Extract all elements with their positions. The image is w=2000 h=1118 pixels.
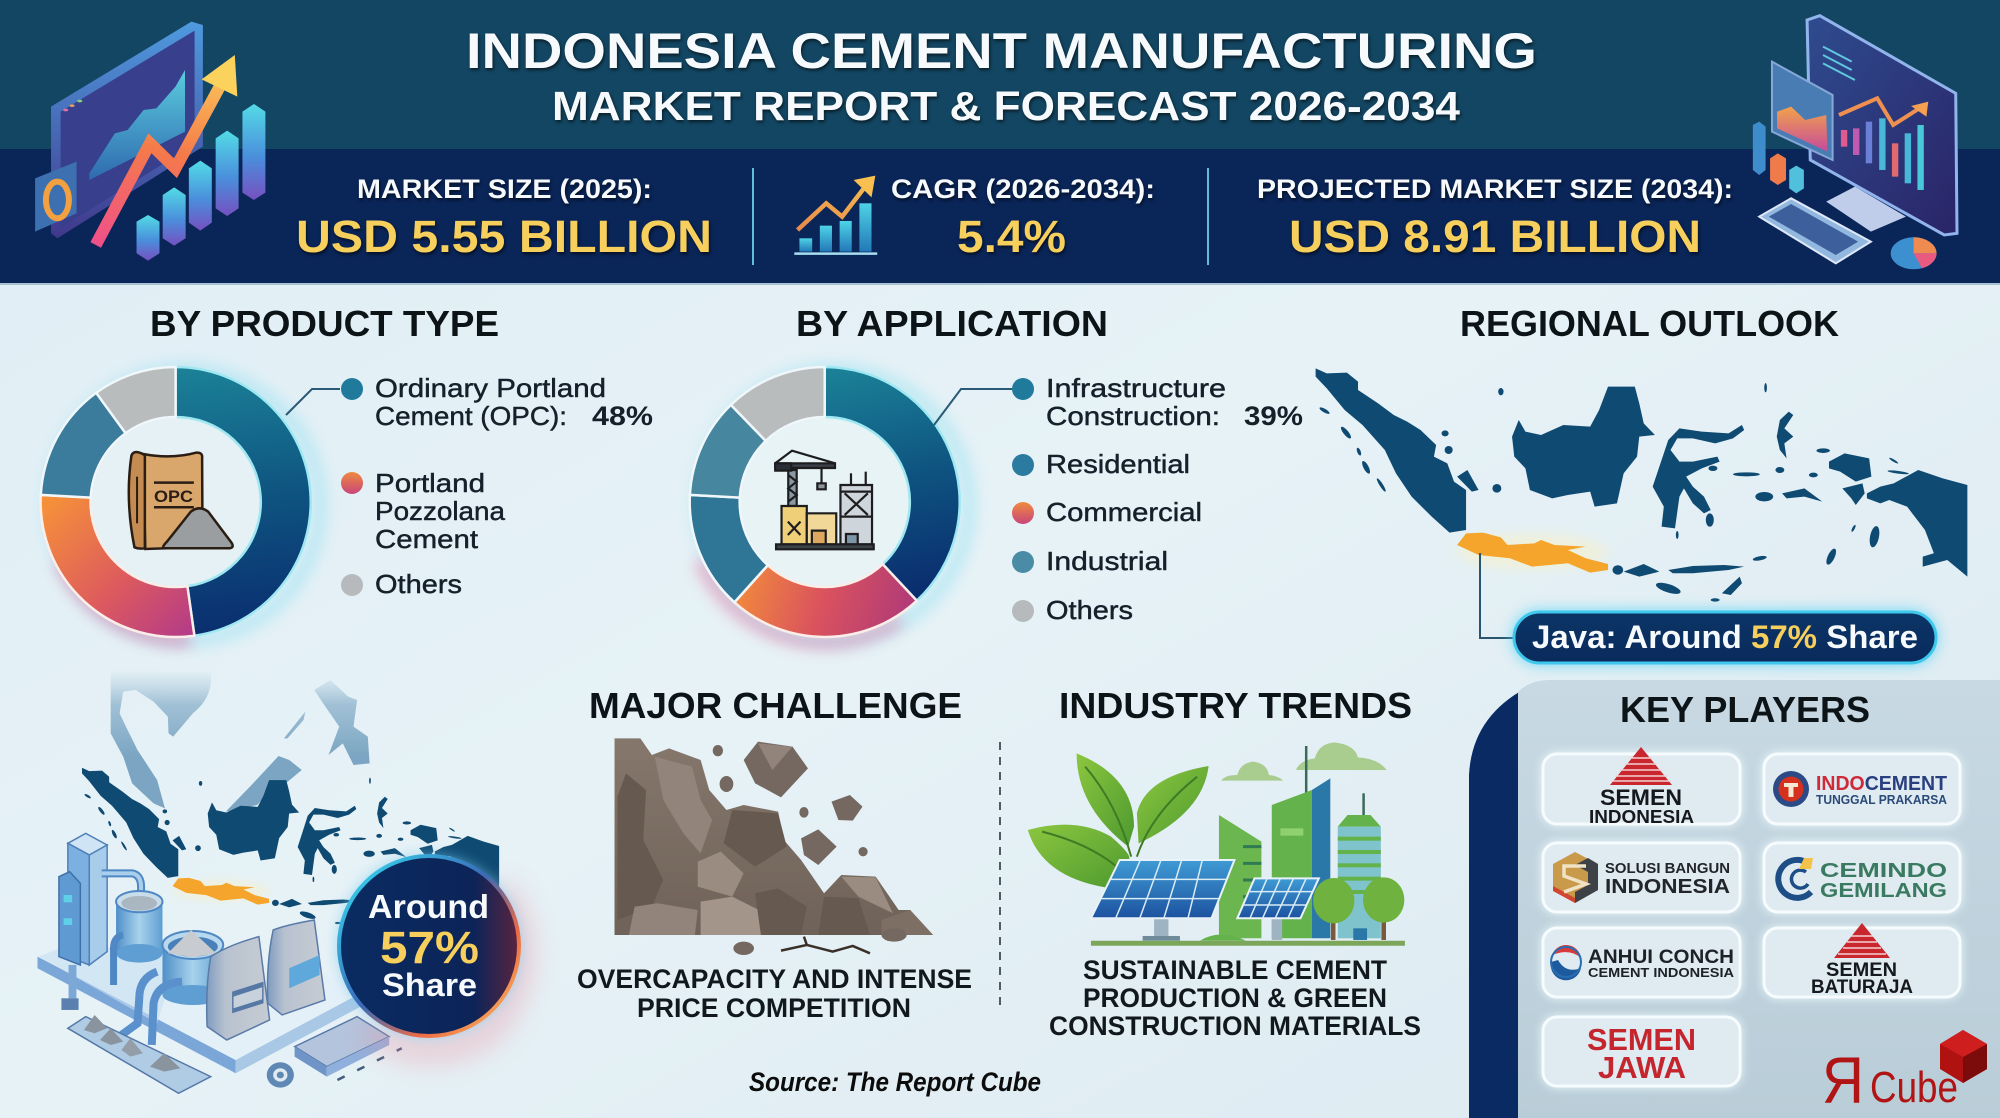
map: Indonesia small — [82, 768, 499, 924]
icon: isometric computer monitor with charts — [1753, 16, 1957, 269]
badge: around 57% share: Share — [382, 967, 477, 1003]
title: MARKET REPORT & FORECAST 2026-2034 — [552, 83, 1460, 129]
legend: ordinary portland cement — [341, 373, 653, 431]
stat: market size: USD 5.55 BILLION — [296, 211, 712, 262]
icon: leaves, solar panels and green buildings — [1028, 742, 1405, 943]
legend: ordinary portland cement: 48% — [592, 401, 653, 431]
logo card: Cemindo Gemilang: CEMINDO — [1820, 860, 1947, 882]
heading: industry trends: INDUSTRY TRENDS — [1059, 685, 1412, 726]
illustration: cement plant with map and share badge — [37, 670, 520, 1093]
legend: infrastructure construction — [1012, 373, 1303, 431]
callout pill: Java share: Java: Around 57% Share — [1532, 619, 1918, 655]
callout pill: Java share — [1514, 612, 1936, 663]
logo card: Semen Baturaja — [1764, 923, 1960, 998]
logo card: Anhui Conch — [1543, 928, 1740, 997]
stat: projected market size: USD 8.91 BILLION — [1289, 211, 1701, 262]
donut chart: application shares — [690, 367, 969, 643]
legend: infrastructure construction: Infrastructure — [1046, 373, 1226, 403]
legend: others: Others — [1046, 595, 1133, 625]
logo card: Solusi Bangun Indonesia: SOLUSI BANGUN — [1605, 861, 1730, 877]
text: trends description: SUSTAINABLE CEMENT — [1083, 955, 1387, 985]
text: challenge description — [577, 964, 972, 1023]
logo card: Semen Jawa: JAWA — [1598, 1050, 1686, 1085]
panel: by product type — [41, 303, 653, 640]
icon: OPC cement bag — [129, 452, 233, 549]
title: INDONESIA CEMENT MANUFACTURING — [466, 23, 1537, 79]
map: Indonesia with Java highlighted — [1316, 368, 1967, 602]
logo card: Cemindo Gemilang — [1764, 843, 1960, 912]
logo card: Semen Indonesia: INDONESIA — [1589, 806, 1694, 827]
stat: CAGR: 5.4% — [957, 211, 1066, 262]
legend: infrastructure construction: 39% — [1244, 401, 1303, 431]
stat: projected market size: PROJECTED MARKET SIZE (2034): — [1257, 174, 1733, 204]
stat: CAGR: CAGR (2026-2034): — [891, 174, 1155, 204]
legend: portland pozzolana cement — [341, 468, 506, 554]
badge: around 57% share: Around — [368, 888, 489, 925]
ghost map of neighbouring countries — [111, 670, 370, 812]
text: trends description — [1049, 955, 1421, 1041]
heading: regional outlook: REGIONAL OUTLOOK — [1460, 303, 1839, 344]
logo card: Semen Baturaja: BATURAJA — [1811, 977, 1913, 998]
legend: residential: Residential — [1046, 449, 1190, 479]
header banner — [0, 0, 2000, 285]
stat: market size: MARKET SIZE (2025): — [357, 174, 652, 204]
legend: portland pozzolana cement: Pozzolana — [375, 496, 506, 526]
stat: projected market size — [1257, 174, 1733, 262]
heading: key players: KEY PLAYERS — [1620, 689, 1870, 730]
icon: isometric cement factory — [37, 833, 402, 1093]
heading: by application: BY APPLICATION — [796, 303, 1108, 344]
logo card: Semen Indonesia: SEMEN — [1600, 785, 1682, 810]
legend: infrastructure construction: Construction: — [1046, 401, 1220, 431]
legend: others: Others — [375, 569, 462, 599]
logo card: Semen Jawa: SEMEN — [1587, 1022, 1696, 1057]
logo: RCube — [1822, 1030, 1987, 1117]
callout leader line — [286, 389, 340, 415]
logo card: Semen Jawa — [1543, 1017, 1740, 1086]
logo card: Semen Baturaja: SEMEN — [1826, 960, 1897, 981]
logo card: Indocement: TUNGGAL PRAKARSA — [1816, 792, 1948, 807]
panel: major challenge — [577, 685, 972, 1023]
logo: RCube: Cube — [1870, 1063, 1958, 1112]
legend: others — [341, 569, 462, 599]
panel: regional outlook — [1316, 303, 1967, 663]
legend: ordinary portland cement: Cement (OPC): — [375, 401, 567, 431]
title — [466, 23, 1537, 129]
logo card: Indocement: INDOCEMENT — [1816, 773, 1947, 795]
stat: CAGR — [891, 174, 1155, 262]
panel: key players — [1469, 680, 2000, 1118]
legend: commercial: Commercial — [1046, 497, 1202, 527]
legend: others — [1012, 595, 1133, 625]
icon: construction crane and buildings — [775, 451, 874, 549]
icon: isometric analytics chart with rising arrow — [35, 22, 265, 261]
logo card: Anhui Conch: ANHUI CONCH — [1588, 947, 1734, 968]
heading: major challenge: MAJOR CHALLENGE — [589, 685, 962, 726]
logo: RCube: Я — [1822, 1043, 1864, 1117]
logo card: Indocement — [1764, 754, 1960, 824]
heading: by product type: BY PRODUCT TYPE — [150, 303, 499, 344]
text: challenge description: OVERCAPACITY AND INTENSE — [577, 964, 972, 994]
stat: market size — [296, 174, 712, 262]
badge: around 57% share — [339, 856, 520, 1050]
logo card: Solusi Bangun Indonesia: INDONESIA — [1605, 876, 1730, 898]
legend: portland pozzolana cement: Portland — [375, 468, 485, 498]
donut chart: product type shares — [41, 367, 320, 640]
panel: by application — [690, 303, 1303, 643]
logo card: Cemindo Gemilang: GEMILANG — [1820, 880, 1947, 902]
legend: industrial — [1012, 546, 1168, 576]
text: trends description: PRODUCTION & GREEN — [1083, 983, 1387, 1013]
source note: Source: The Report Cube — [749, 1067, 1041, 1097]
text: trends description: CONSTRUCTION MATERIALS — [1049, 1011, 1421, 1041]
logo card: Solusi Bangun Indonesia — [1543, 843, 1740, 912]
legend: ordinary portland cement: Ordinary Portland — [375, 373, 606, 403]
badge: around 57% share: 57% — [380, 922, 479, 973]
icon: collapsing rock pile — [615, 738, 933, 955]
icon: OPC cement bag: OPC — [154, 487, 193, 506]
logo card: Semen Indonesia — [1543, 747, 1740, 827]
legend: portland pozzolana cement: Cement — [375, 524, 479, 554]
panel: industry trends — [1028, 685, 1421, 1041]
callout leader line — [934, 389, 1012, 425]
legend: industrial: Industrial — [1046, 546, 1168, 576]
logo card: Anhui Conch: CEMENT INDONESIA — [1588, 965, 1735, 980]
icon: CAGR growth chart — [794, 176, 877, 254]
text: challenge description: PRICE COMPETITION — [637, 993, 911, 1023]
